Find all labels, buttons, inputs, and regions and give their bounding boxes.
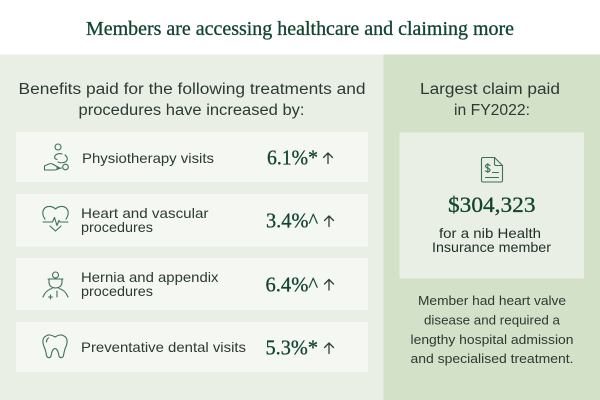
label: procedures [81, 283, 153, 299]
heading: largest claim paid: Largest claim paid [420, 81, 560, 98]
caption: for a nib Health [439, 225, 541, 241]
text block: member description: Member had heart valve [418, 293, 566, 308]
row: hernia and appendix procedures [16, 258, 368, 310]
amount: $304,323 [448, 192, 536, 217]
row: physiotherapy visits [16, 132, 368, 182]
label: Preventative dental visits [81, 339, 246, 355]
arrow up [324, 153, 332, 164]
title: Members are accessing healthcare and claiming more [86, 19, 514, 40]
label [81, 269, 218, 299]
heading: benefits paid: Benefits paid for the following treatments and [18, 81, 366, 98]
icon: tooth [43, 335, 67, 358]
icon: invoice document [482, 158, 502, 182]
caption: Insurance member [432, 239, 551, 255]
icon: surgeon [43, 272, 68, 299]
value: 6.4%^: 6.4%^ [266, 272, 318, 296]
icon: physiotherapy massage [44, 144, 68, 170]
panel: largest claim [384, 54, 600, 400]
text block: member description [410, 293, 574, 366]
icon: heart with pulse [43, 206, 68, 231]
row: heart and vascular procedures [16, 194, 368, 246]
row: preventative dental visits [16, 322, 368, 372]
heading: largest claim paid: in FY2022: [454, 102, 530, 119]
value: 5.3%*: 5.3%* [266, 336, 318, 360]
text block: member description: lengthy hospital admission [410, 332, 574, 347]
arrow up [324, 216, 334, 226]
value: 3.4%^: 3.4%^ [266, 208, 318, 232]
label: procedures [81, 219, 153, 235]
heading: benefits paid [18, 81, 366, 119]
label: Hernia and appendix [81, 269, 218, 285]
label: Heart and vascular [81, 205, 209, 221]
value: 6.1%*: 6.1%* [267, 146, 318, 170]
label: Physiotherapy visits [82, 150, 214, 166]
text block: member description: disease and required a [424, 312, 561, 328]
heading: largest claim paid [420, 81, 560, 119]
panel: treatment benefits [0, 54, 384, 400]
label [81, 205, 209, 235]
text block: member description: and specialised treatment. [410, 351, 574, 366]
arrow up [324, 280, 334, 290]
arrow up [324, 343, 334, 354]
heading: benefits paid: procedures have increased by: [78, 102, 304, 119]
caption [432, 225, 551, 255]
card: claim amount [400, 132, 584, 278]
